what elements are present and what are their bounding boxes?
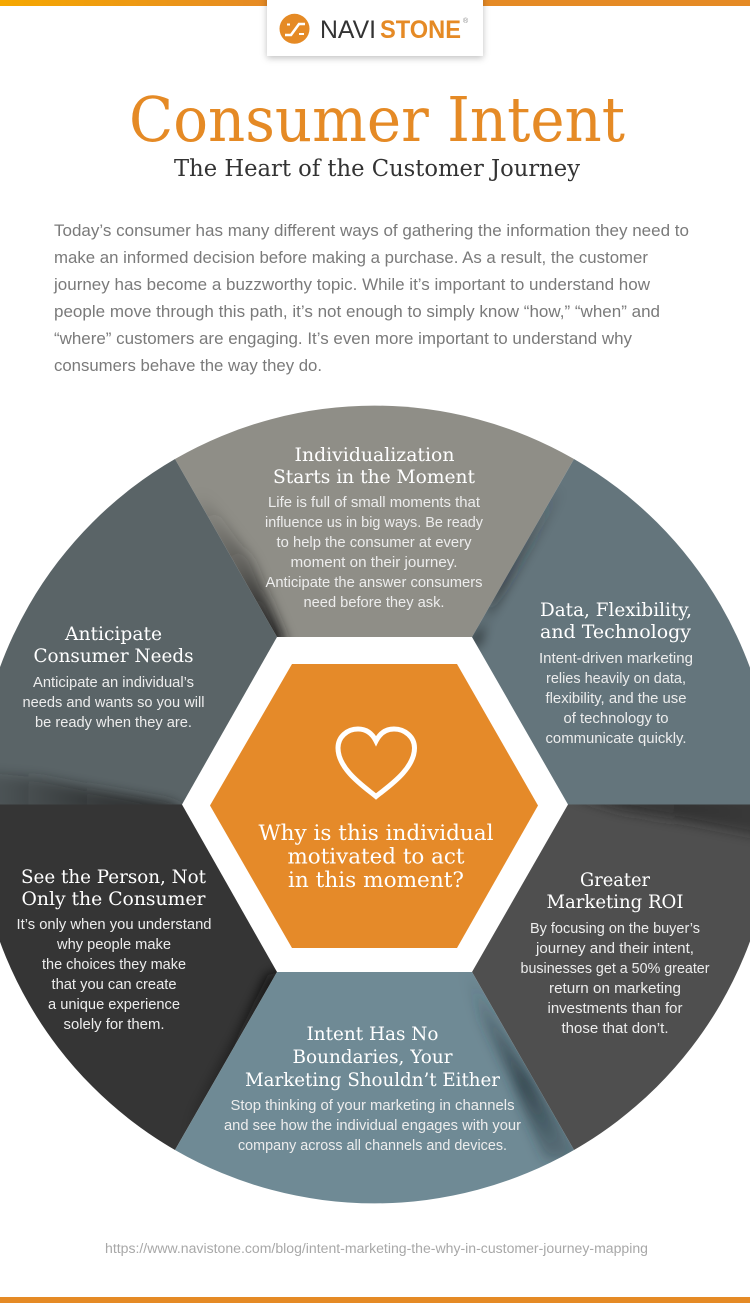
panel: see the person — [0, 804, 285, 1155]
body text: businesses get a 50% greater — [520, 961, 710, 977]
body text: flexibility, and the use — [546, 691, 686, 707]
body text — [265, 495, 484, 611]
body text: needs and wants so you will — [22, 695, 204, 711]
heading: and Technology — [540, 621, 691, 643]
panel: greater roi — [472, 795, 750, 1150]
body text: need before they ask. — [304, 595, 444, 611]
logo card — [267, 0, 483, 56]
intro paragraph: Today’s consumer has many different ways of gathering the information they need to — [54, 222, 689, 240]
heading: Intent Has No — [306, 1023, 438, 1045]
subtitle: The Heart of the Customer Journey — [174, 156, 580, 182]
body text: Life is full of small moments that — [268, 495, 480, 511]
panel: anticipate needs — [0, 459, 277, 815]
body text: influence us in big ways. Be ready — [265, 515, 484, 531]
body text: return on marketing — [549, 981, 681, 997]
body text: why people make — [56, 937, 171, 953]
body text: those that don’t. — [562, 1021, 668, 1037]
icon: heart — [338, 729, 414, 796]
body text: that you can create — [52, 977, 176, 993]
panel: individualization — [165, 406, 574, 645]
body text: Stop thinking of your marketing in channels — [230, 1098, 514, 1114]
body text: investments than for — [548, 1001, 683, 1017]
intro paragraph: make an informed decision before making a purchase. As a result, the customer — [54, 249, 649, 267]
title: Consumer Intent — [129, 83, 625, 156]
heading — [21, 866, 206, 910]
body text: Intent-driven marketing — [539, 651, 693, 667]
icon: navistone circle — [280, 14, 310, 44]
heading: Individualization — [294, 444, 454, 466]
body text: solely for them. — [64, 1017, 164, 1033]
body text: company across all channels and devices. — [238, 1138, 507, 1154]
panel: data flexibility — [470, 459, 750, 804]
heading: Marketing Shouldn’t Either — [245, 1069, 501, 1091]
body text: Anticipate an individual’s — [33, 675, 194, 691]
heading: Consumer Needs — [34, 645, 194, 667]
center question: Why is this individual — [258, 821, 494, 846]
body text: communicate quickly. — [546, 731, 686, 747]
body text: By focusing on the buyer’s — [530, 921, 700, 937]
heading: Greater — [580, 869, 651, 891]
intro paragraph — [53, 222, 689, 375]
heading — [546, 869, 684, 913]
intro paragraph: consumers behave the way they do. — [54, 357, 322, 375]
center question: motivated to act — [288, 844, 465, 870]
heading — [273, 444, 475, 488]
logo wordmark: NAVI — [320, 16, 376, 44]
body text: moment on their journey. — [290, 555, 458, 571]
heading: Marketing ROI — [546, 891, 684, 913]
body text — [16, 917, 212, 1033]
intro paragraph: people move through this path, it’s not enough to simply know “how,” “when” and — [54, 303, 660, 321]
body text: to help the consumer at every — [276, 535, 472, 551]
logo wordmark: STONE — [380, 16, 461, 44]
body text — [22, 675, 204, 731]
body text: It’s only when you understand — [16, 917, 212, 933]
source url: https://www.navistone.com/blog/intent-marketing-the-why-in-customer-journey-mapping — [105, 1241, 648, 1256]
logo wordmark — [320, 16, 469, 44]
heading: Boundaries, Your — [292, 1046, 453, 1068]
center question — [258, 821, 494, 893]
heading: Starts in the Moment — [273, 466, 475, 488]
body text: a unique experience — [48, 997, 180, 1013]
intro paragraph: “where” customers are engaging. It’s even more important to understand why — [54, 330, 633, 348]
center hexagon — [210, 664, 538, 948]
bottom orange bar — [0, 1297, 750, 1303]
body text — [520, 921, 710, 1037]
top orange bar right — [483, 0, 750, 6]
intro paragraph: journey has become a buzzworthy topic. While it’s important to understand how — [53, 276, 650, 294]
top orange bar left — [0, 0, 267, 6]
body text: relies heavily on data, — [546, 671, 686, 687]
panel: intent no boundaries — [175, 970, 582, 1203]
body text: and see how the individual engages with your — [224, 1118, 521, 1134]
heading: Anticipate — [64, 623, 162, 645]
body text: journey and their intent, — [535, 941, 694, 957]
body text: the choices they make — [42, 957, 186, 973]
body text — [539, 651, 693, 747]
body text: of technology to — [564, 711, 668, 727]
logo wordmark: ® — [463, 17, 469, 25]
heading: Only the Consumer — [22, 888, 206, 910]
body text — [224, 1098, 521, 1154]
heading: See the Person, Not — [21, 866, 206, 888]
body text: be ready when they are. — [35, 715, 192, 731]
heading — [34, 623, 194, 667]
heading — [540, 599, 692, 643]
heading — [245, 1023, 501, 1091]
heading: Data, Flexibility, — [540, 599, 692, 621]
center question: in this moment? — [288, 868, 464, 893]
body text: Anticipate the answer consumers — [266, 575, 482, 591]
